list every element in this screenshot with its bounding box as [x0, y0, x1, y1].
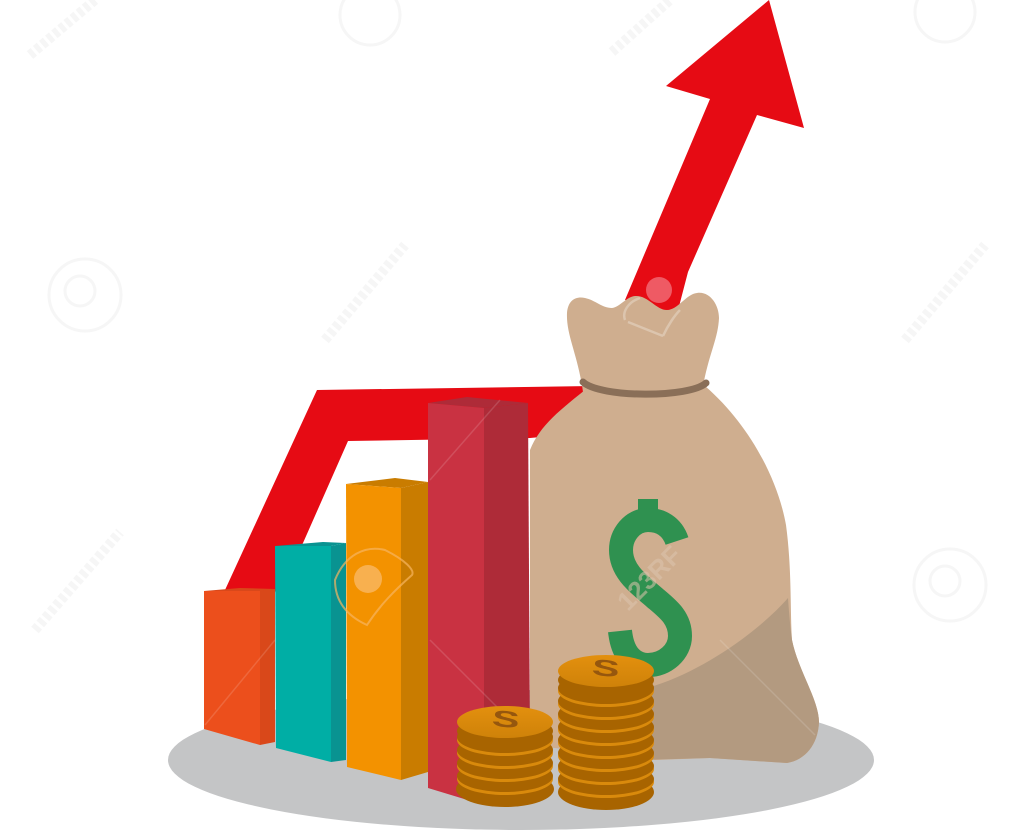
bag body — [530, 386, 819, 763]
ground shadow — [168, 690, 874, 830]
bar: orange — [204, 588, 275, 745]
coin stack: short — [456, 706, 554, 807]
watermarks on white background — [30, 0, 986, 630]
bar chart — [204, 397, 530, 805]
bar: teal — [275, 542, 346, 762]
bar: amber — [346, 478, 428, 780]
bar: crimson — [428, 397, 530, 805]
coin symbol: S — [491, 706, 521, 734]
icon: dollar sign — [620, 499, 680, 665]
bag neck — [567, 293, 719, 392]
bag lower shade — [640, 598, 819, 763]
watermarks on artwork: 123RF — [611, 540, 687, 616]
bag rope — [583, 382, 706, 394]
watermarks on artwork — [205, 277, 815, 735]
red growth arrow — [225, 0, 804, 592]
money bag — [530, 293, 819, 763]
coin stack: tall — [558, 655, 654, 810]
coin symbol: S — [591, 655, 621, 683]
